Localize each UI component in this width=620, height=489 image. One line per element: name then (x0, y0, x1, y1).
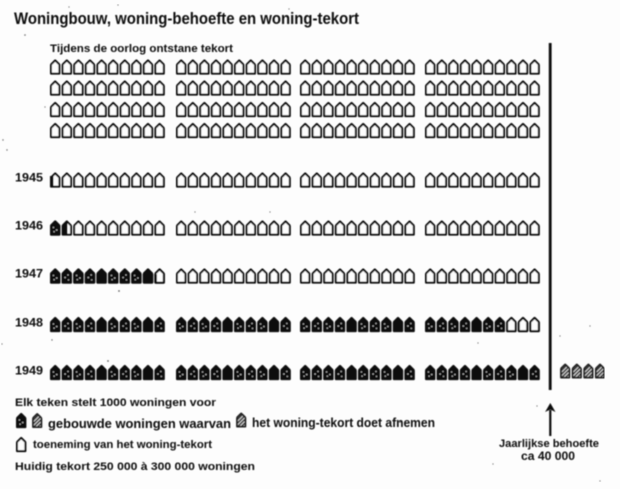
heading: wartime shortage: Tijdens de oorlog ontstane tekort (50, 43, 233, 55)
label: annual need: ca 40 000 (521, 451, 575, 463)
row: 1946: 1946 (15, 220, 43, 232)
arrow: annual need (545, 403, 556, 436)
row: 1947: 1947 (15, 268, 43, 280)
row: 1948: 1948 (15, 318, 44, 330)
row: 1947 (15, 268, 539, 283)
label: annual need: Jaarlijkse behoefte (499, 438, 599, 450)
legend line: current shortage: Huidig tekort 250 000 à 300 000 woningen (15, 461, 255, 473)
row: 1946 (15, 220, 539, 235)
legend line: built houses: het woning-tekort doet afnemen (252, 416, 435, 430)
title: Woningbouw, woning-behoefte en woning-tekort (14, 9, 359, 28)
row: 1949 (15, 366, 539, 379)
annual need line (549, 43, 552, 390)
label: annual need (499, 438, 599, 463)
row: 1949: 1949 (15, 366, 43, 378)
legend line: increase in shortage: toeneming van het woning-tekort (33, 439, 212, 451)
legend line: built houses: gebouwde woningen waarvan (48, 417, 231, 431)
row: 1948 (15, 318, 539, 331)
row: 1945 (15, 172, 539, 187)
hatched surplus houses (561, 364, 604, 378)
row: 1945: 1945 (15, 172, 44, 184)
legend line: built houses (17, 413, 435, 431)
legend (15, 397, 435, 473)
pictogram rows: wartime shortage (51, 60, 539, 137)
legend line: scale: Elk teken stelt 1000 woningen voor (15, 397, 217, 409)
